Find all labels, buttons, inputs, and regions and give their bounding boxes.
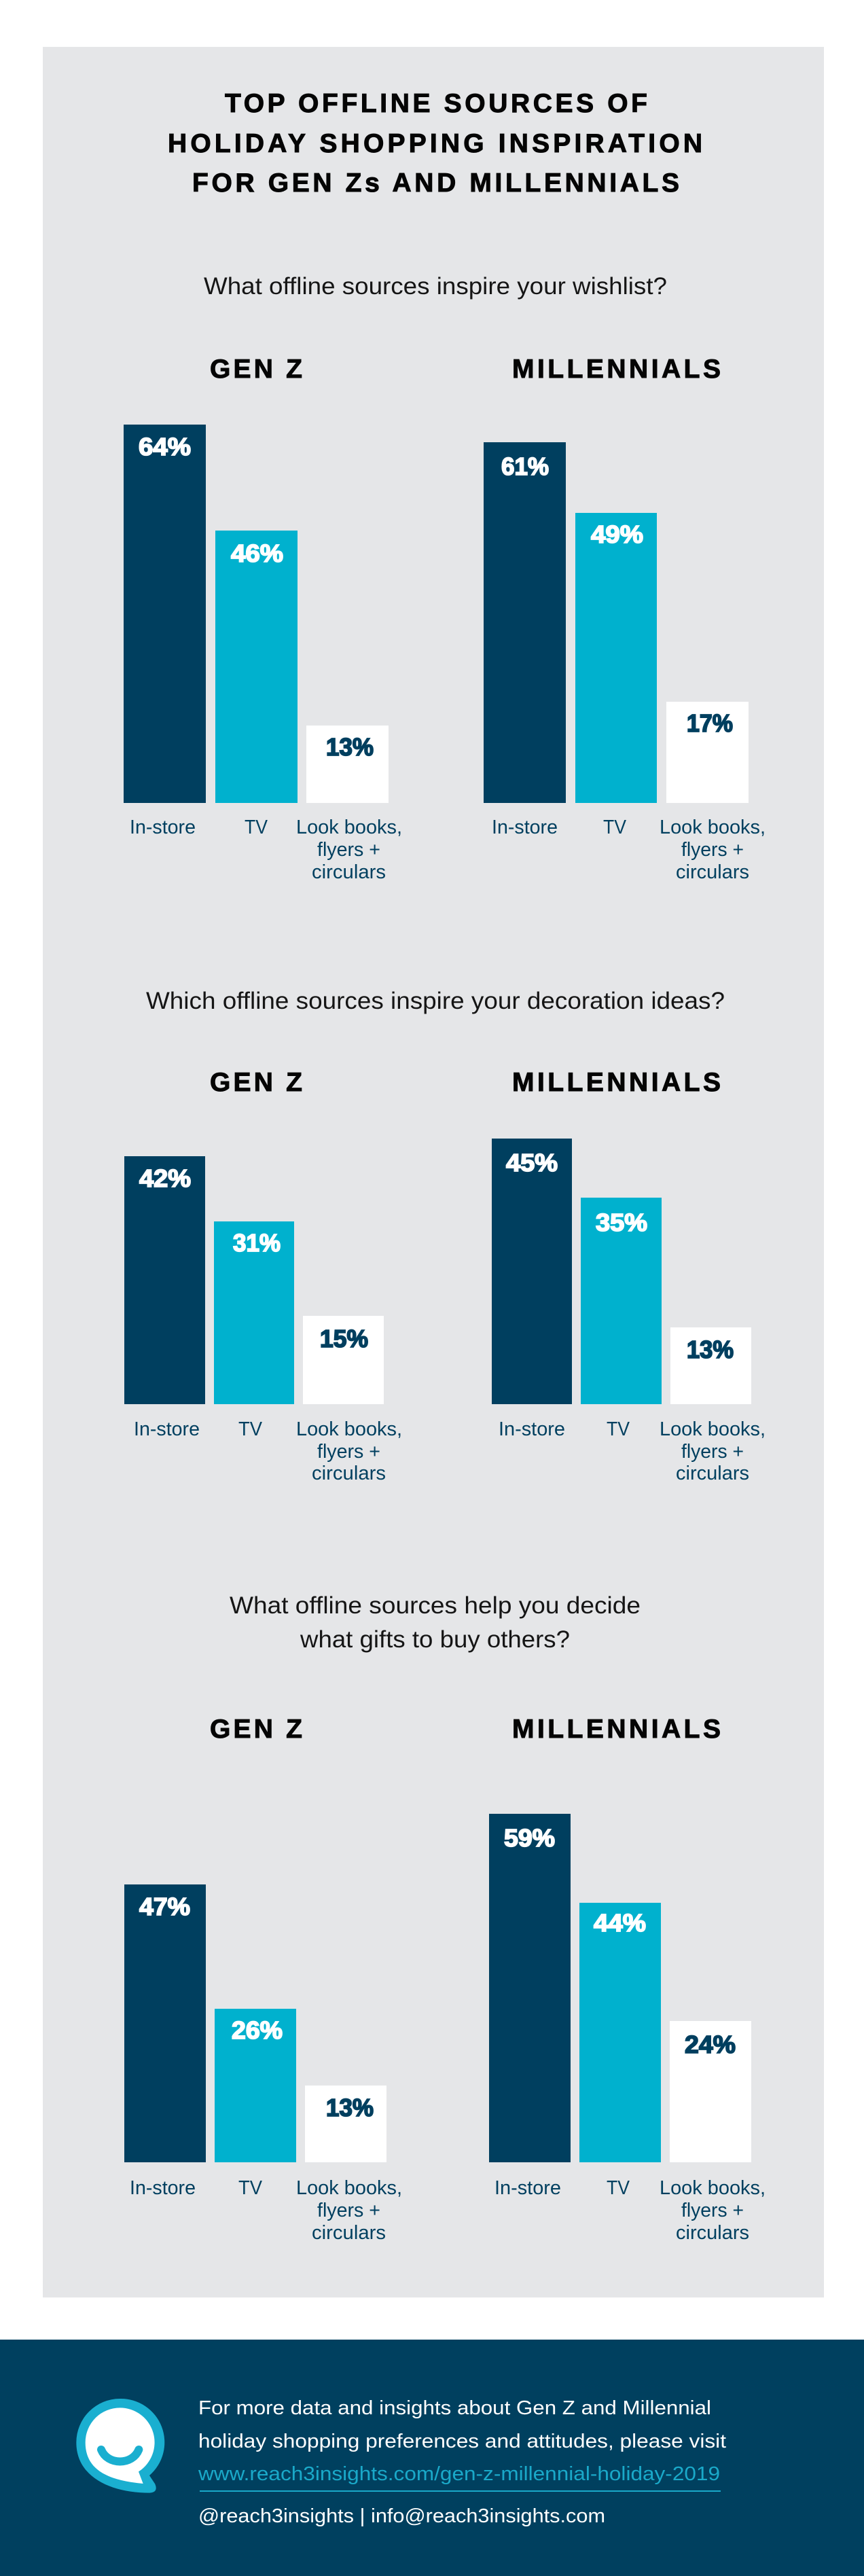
bar: Look books 15%: 15% [320, 1325, 368, 1353]
section: wishlist [124, 273, 766, 883]
title: TOP OFFLINE SOURCES OF [225, 89, 647, 118]
bar: TV 31%: 31% [233, 1229, 281, 1257]
question: wishlist: What offline sources inspire your wishlist? [204, 273, 667, 300]
axis labels: TV [245, 817, 268, 838]
bar: Look books 15% [303, 1316, 384, 1404]
section: gifts [124, 1592, 766, 2244]
axis labels: In-store [130, 817, 196, 838]
axis labels: TV [238, 1418, 263, 1440]
bar: In-store 61% [484, 442, 566, 803]
title [168, 89, 702, 198]
bar: Look books 13% [305, 2086, 386, 2162]
bar: TV 26%: 26% [232, 2016, 283, 2044]
axis labels: TV [607, 1418, 630, 1440]
axis labels: circulars [676, 2222, 749, 2244]
icon: Reach3 speech bubble logo [76, 2399, 164, 2493]
panel: main grey background [43, 47, 824, 2297]
title: FOR GEN Zs AND MILLENNIALS [192, 168, 679, 198]
bar: Look books 24% [670, 2021, 751, 2162]
bar: TV 46% [215, 531, 298, 803]
axis labels [492, 817, 766, 883]
axis labels [130, 817, 402, 883]
axis labels: In-store [130, 2177, 196, 2199]
axis labels: circulars [312, 861, 386, 883]
axis labels: Look books, [660, 1418, 766, 1440]
bar: Look books 13%: 13% [687, 1336, 734, 1363]
axis labels: TV [607, 2177, 630, 2199]
bar: TV 44% [579, 1903, 661, 2162]
bar chart: Millennials decoration [492, 1139, 766, 1484]
axis labels: Look books, [296, 817, 402, 838]
axis labels: circulars [676, 861, 749, 883]
axis labels: Look books, [660, 817, 766, 838]
bar: In-store 59% [489, 1814, 571, 2162]
bar: TV 44%: 44% [594, 1909, 646, 1937]
question: gifts: What offline sources help you decide [230, 1592, 641, 1619]
footer text: www.reach3insights.com/gen-z-millennial-holiday-2019 [198, 2463, 720, 2485]
footer text: holiday shopping preferences and attitudes, please visit [198, 2431, 726, 2452]
bar: In-store 59%: 59% [504, 1824, 555, 1852]
axis labels [499, 1418, 766, 1484]
question: gifts [230, 1592, 641, 1653]
heading: Gen Z wishlist: GEN Z [210, 355, 302, 384]
axis labels: In-store [134, 1418, 200, 1440]
axis labels: flyers + [681, 2200, 744, 2221]
bar: TV 49%: 49% [591, 520, 643, 548]
bar: In-store 42%: 42% [139, 1164, 191, 1192]
axis labels: In-store [494, 2177, 561, 2199]
axis labels: In-store [499, 1418, 565, 1440]
bar chart: Gen Z gifts [124, 1884, 402, 2244]
question: decoration: Which offline sources inspire your decoration ideas? [146, 988, 725, 1014]
axis labels: Look books, [296, 1418, 402, 1440]
bar: In-store 64% [124, 425, 206, 803]
bar chart: Gen Z decoration [124, 1156, 402, 1484]
bar: In-store 45% [492, 1139, 572, 1404]
bar: TV 35%: 35% [596, 1209, 647, 1236]
axis labels: circulars [312, 2222, 386, 2244]
question: gifts: what gifts to buy others? [300, 1626, 570, 1653]
axis labels [494, 2177, 766, 2244]
bar: In-store 64%: 64% [139, 433, 191, 461]
footer [0, 2340, 864, 2576]
bar: TV 35% [581, 1198, 662, 1404]
heading: Millennials decoration: MILLENNIALS [512, 1068, 721, 1097]
axis labels: flyers + [317, 839, 380, 861]
bar chart: Millennials wishlist [484, 442, 766, 883]
bar: Look books 17% [666, 702, 749, 803]
footer text: For more data and insights about Gen Z and Millennial [198, 2397, 711, 2419]
footer text [198, 2397, 726, 2527]
axis labels [130, 2177, 402, 2244]
heading: Millennials wishlist: MILLENNIALS [512, 355, 721, 384]
axis labels: flyers + [317, 1441, 380, 1463]
bar: In-store 47%: 47% [139, 1893, 190, 1920]
bar: In-store 61%: 61% [501, 452, 549, 480]
axis labels: flyers + [317, 2200, 380, 2221]
bar: In-store 45%: 45% [506, 1149, 558, 1177]
bar: In-store 47% [124, 1884, 206, 2162]
axis labels: Look books, [296, 2177, 402, 2199]
axis labels: flyers + [681, 1441, 744, 1463]
axis labels: circulars [312, 1463, 386, 1484]
axis labels: In-store [492, 817, 558, 838]
bar: TV 46%: 46% [231, 539, 283, 567]
axis labels: Look books, [660, 2177, 766, 2199]
axis labels [134, 1418, 402, 1484]
axis labels: circulars [676, 1463, 749, 1484]
bar chart: Millennials gifts [489, 1814, 766, 2244]
axis labels: flyers + [681, 839, 744, 861]
bar: Look books 13%: 13% [326, 733, 374, 761]
heading: Gen Z gifts: GEN Z [210, 1715, 302, 1744]
footer text: @reach3insights | info@reach3insights.com [198, 2505, 605, 2527]
footer background [0, 2340, 864, 2576]
bar: TV 26% [215, 2009, 296, 2162]
bar: Look books 13% [306, 726, 389, 803]
heading: Gen Z decoration: GEN Z [210, 1068, 302, 1097]
bar: Look books 13%: 13% [326, 2094, 374, 2122]
axis labels: TV [238, 2177, 263, 2199]
section: decoration ideas [124, 988, 766, 1484]
title: HOLIDAY SHOPPING INSPIRATION [168, 129, 702, 158]
axis labels: TV [603, 817, 627, 838]
bar: Look books 17%: 17% [687, 709, 733, 737]
bar: Look books 13% [670, 1327, 751, 1404]
bar: Look books 24%: 24% [685, 2031, 736, 2058]
heading: Millennials gifts: MILLENNIALS [512, 1715, 721, 1744]
bar: TV 49% [575, 513, 657, 803]
bar chart: Gen Z wishlist [124, 425, 402, 883]
bar: In-store 42% [124, 1156, 205, 1404]
bar: TV 31% [214, 1221, 294, 1404]
